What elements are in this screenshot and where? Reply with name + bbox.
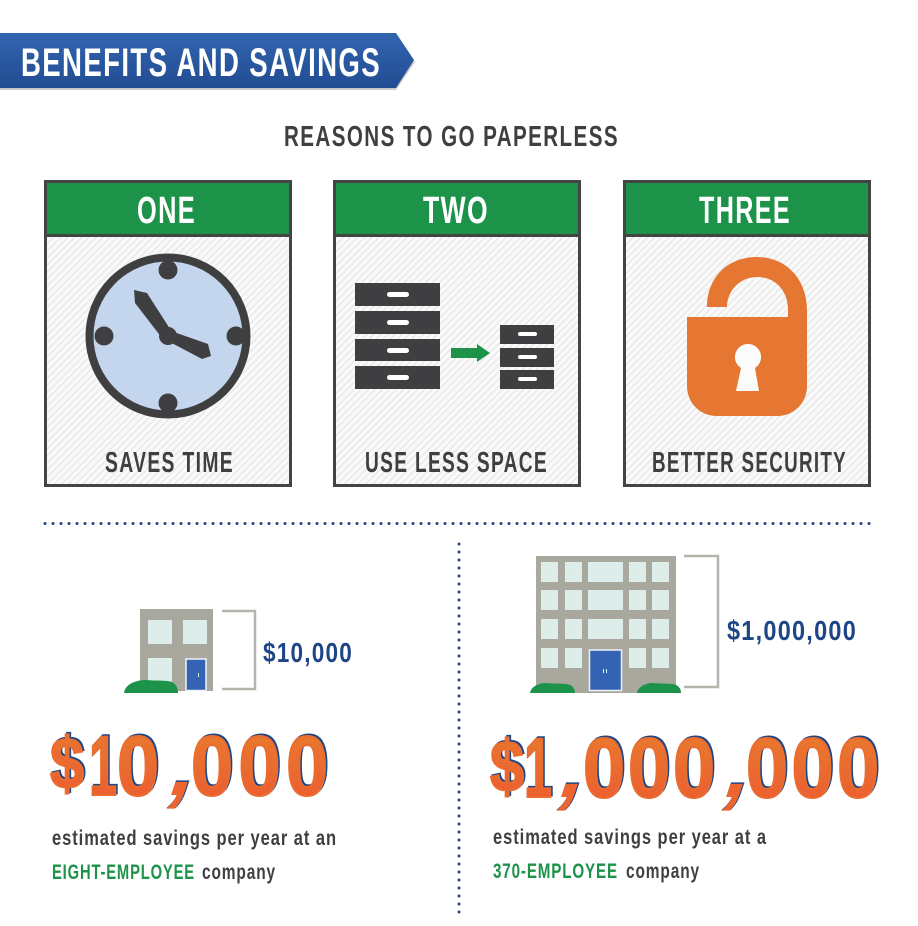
big number: $1,000,000: $ (492, 726, 526, 806)
big number: $1,000,000: $ (490, 727, 524, 807)
section: 370-employee company savings: company (626, 860, 700, 883)
panel number: three: THREE (699, 190, 791, 232)
panel number: one: ONE (137, 190, 196, 232)
big number: $1,000,000: , (550, 717, 606, 815)
big number: $1,000,000 (490, 717, 884, 816)
icon: small building (124, 609, 213, 693)
icon: large building (530, 556, 681, 693)
panel: one, saves time (46, 182, 290, 486)
big number: $1,000,000: 1 (526, 719, 554, 814)
big number: $10,000: $ (52, 723, 86, 803)
big number: $10,000 (50, 715, 335, 814)
big number: $1,000,000: , (715, 717, 771, 815)
section: eight-employee company savings: EIGHT-EMPLOYEE (52, 861, 195, 884)
value: $10,000: $10,000 (263, 637, 353, 668)
bracket: building height (222, 611, 255, 689)
caption: 370-employee company: estimated savings per year at a (493, 826, 767, 849)
banner heading: benefits and savings (0, 33, 415, 90)
section: eight-employee company savings: company (202, 861, 276, 884)
panel: three, better security (624, 182, 870, 486)
big number: $10,000: 1 (89, 719, 117, 813)
label: saves time: SAVES TIME (105, 447, 234, 479)
panel: two, use less space (334, 182, 580, 486)
big number: $10,000: 1 (90, 717, 119, 812)
big number: $1,000,000: , (549, 718, 605, 816)
big number: $10,000: 000 (192, 718, 335, 811)
icon: large file cabinet (355, 283, 440, 389)
panel number: two: TWO (423, 190, 489, 232)
banner heading: benefits and savings: BENEFITS AND SAVINGS (21, 41, 381, 85)
big number: $1,000,000: 000 (583, 721, 718, 815)
subheading: reasons to go paperless: REASONS TO GO PAPERLESS (284, 121, 619, 153)
caption: eight-employee company: estimated savings per year at an (52, 827, 337, 850)
icon: small file cabinet (500, 325, 554, 389)
arrow: green pointing right (451, 344, 490, 362)
big number: $1,000,000: , (714, 718, 770, 816)
big number: $10,000: $ (50, 724, 84, 804)
big number: $1,000,000: 000 (748, 720, 884, 813)
section: 370-employee company savings (490, 556, 884, 883)
big number: $1,000,000: 000 (584, 720, 720, 813)
big number: $10,000: 000 (191, 719, 334, 813)
icon: open padlock (687, 257, 807, 416)
label: use less space: USE LESS SPACE (365, 447, 548, 479)
big number: $10,000: , (159, 716, 215, 814)
big number: $10,000: 0 (117, 719, 159, 813)
big number: $10,000: 0 (118, 718, 161, 811)
big number: $1,000,000: 1 (524, 721, 552, 815)
bracket: building height (684, 556, 718, 687)
big number: $1,000,000: 000 (746, 721, 883, 815)
section: eight-employee company savings (50, 609, 353, 884)
icon: clock (90, 258, 246, 414)
value: $1,000,000: $1,000,000 (727, 615, 857, 646)
section: 370-employee company savings: 370-EMPLOYEE (493, 860, 618, 883)
big number: $10,000: , (160, 715, 216, 813)
